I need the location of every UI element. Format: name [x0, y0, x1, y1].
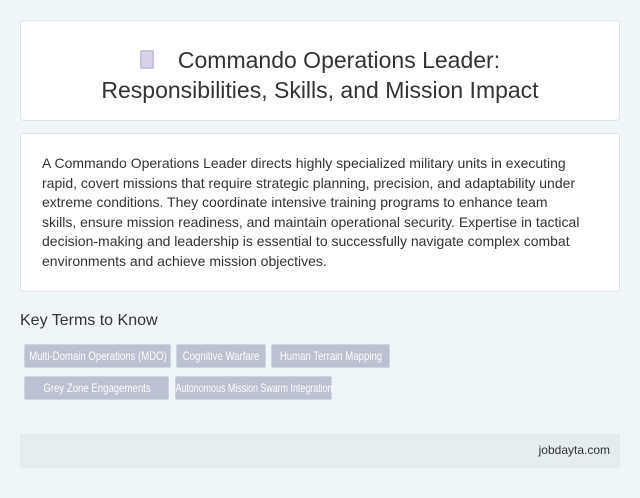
footer text: jobdayta.com	[539, 443, 610, 457]
description text: extreme conditions. They coordinate intensive training programs to enhance team	[42, 194, 548, 210]
tag 5	[175, 376, 332, 400]
title: Responsibilities, Skills, and Mission Impact	[101, 77, 539, 103]
description text: skills, ensure mission readiness, and maintain operational security. Expertise in tactical	[42, 214, 579, 230]
tag 3: Human Terrain Mapping	[279, 349, 382, 363]
header card	[20, 20, 620, 121]
description text: A Commando Operations Leader directs highly specialized military units in executing	[42, 155, 566, 171]
footer	[20, 434, 620, 468]
tag 4: Grey Zone Engagements	[43, 381, 150, 395]
tag 2: Cognitive Warfare	[183, 349, 259, 363]
description card	[20, 133, 620, 292]
description text: rapid, covert missions that require strategic planning, precision, and adaptability under	[42, 175, 575, 191]
tag 5: Autonomous Mission Swarm Integration	[175, 381, 332, 395]
description text: environments and achieve mission objectives.	[42, 253, 327, 269]
tag 2	[176, 344, 266, 368]
tag 1: Multi-Domain Operations (MDO)	[29, 349, 166, 363]
description text	[42, 155, 579, 269]
description text: decision-making and leadership is essential to successfully navigate complex combat	[42, 233, 570, 249]
tag 4	[24, 376, 169, 400]
title: Commando Operations Leader:	[178, 47, 500, 73]
tag 1	[24, 344, 171, 368]
tag 3	[271, 344, 390, 368]
heading: key terms: Key Terms to Know	[20, 312, 158, 329]
title	[101, 47, 539, 103]
icon: scroll	[140, 50, 154, 69]
